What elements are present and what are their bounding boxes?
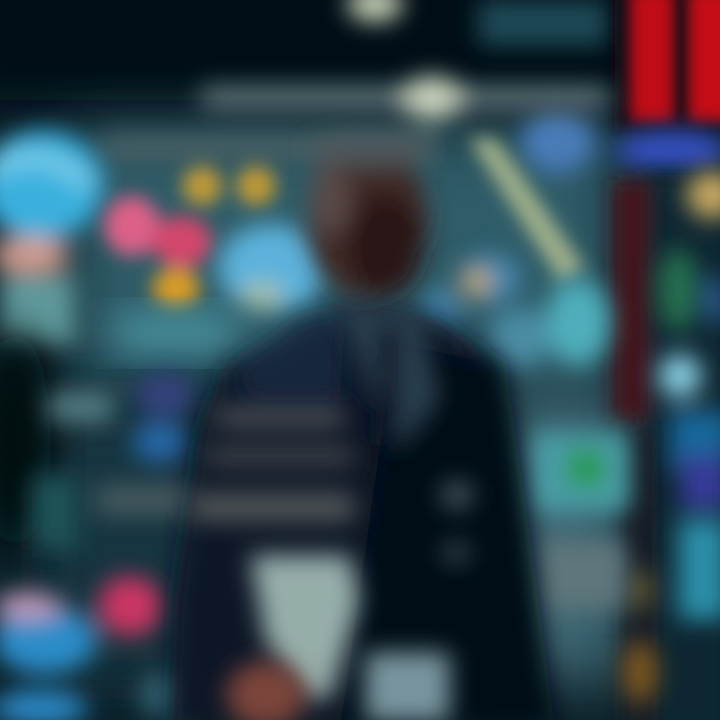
person: suit body [170,305,555,720]
right small icons [420,254,610,368]
hand [226,661,306,720]
light shirt panel lower [250,555,450,720]
wifi icon left [0,130,104,345]
blue band under red screen [520,110,720,174]
pink and yellow icon [104,196,212,308]
teal band under icons [115,315,235,351]
right dark column [612,175,720,720]
right side coloured tiles [622,171,720,704]
heading band, blurred text [98,76,610,160]
left black figure [0,330,51,550]
bottom left colour icons [0,576,191,720]
diagonal light beam [468,138,585,284]
left mid panel icons [32,373,195,550]
light blue circle icon [218,224,326,312]
yellow icons [182,166,276,206]
person: shirt collar and tie [335,300,440,450]
green chart panel right [530,432,630,610]
person: head [308,134,428,298]
red screen top right [615,0,720,130]
overlaid blurred text on suit [190,408,472,564]
top dark panel [347,0,608,46]
